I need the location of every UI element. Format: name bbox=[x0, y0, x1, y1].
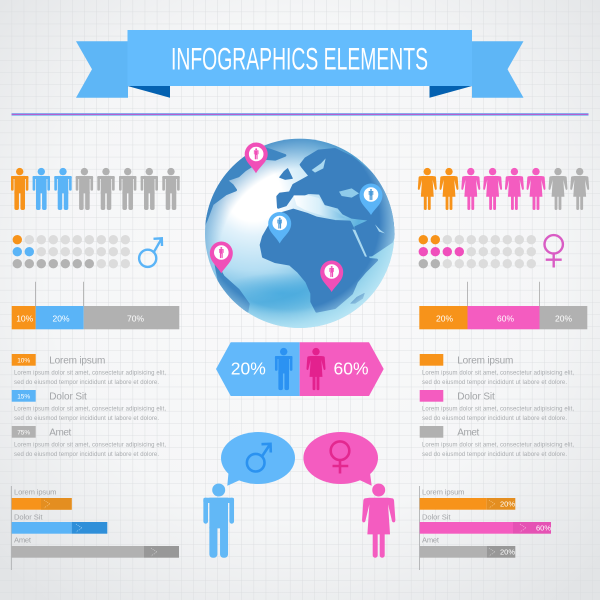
left legend bbox=[12, 354, 166, 458]
bar: dolor sit: Dolor Sit bbox=[14, 512, 43, 521]
legend item: dolor sit bbox=[420, 390, 574, 422]
arabia bbox=[356, 221, 395, 255]
left horizontal bar chart bbox=[11, 486, 179, 570]
legend item: dolor sit: 15% bbox=[17, 394, 30, 400]
header divider line bbox=[12, 113, 588, 116]
legend item: amet: sed do eiusmod tempor incididunt ut labore et dolore. bbox=[422, 452, 567, 458]
title: INFOGRAPHICS ELEMENTS bbox=[171, 40, 428, 76]
legend item: amet: Lorem ipsum dolor sit amet, consectetur adipisicing elit, bbox=[422, 443, 574, 449]
bar: amet 20%: 20% bbox=[500, 548, 515, 556]
figure: woman bbox=[362, 484, 395, 558]
legend item: dolor sit bbox=[12, 390, 166, 422]
bar: lorem ipsum 20%: Lorem ipsum bbox=[422, 487, 464, 496]
badge woman icon bbox=[306, 348, 326, 390]
baltic sea bbox=[312, 158, 326, 173]
eurasia bbox=[278, 149, 395, 234]
male pictogram row bbox=[11, 168, 180, 210]
legend item: lorem ipsum: Lorem ipsum bbox=[457, 355, 513, 366]
africa bbox=[261, 210, 377, 311]
legend item: lorem ipsum: Lorem ipsum dolor sit amet, consectetur adipisicing elit, bbox=[422, 371, 574, 377]
pin: blue west africa bbox=[268, 212, 291, 244]
female stacked percentage bar bbox=[419, 282, 587, 329]
male stacked percentage bar: 10% bbox=[16, 314, 34, 324]
red sea bbox=[352, 229, 367, 257]
female pictogram row bbox=[418, 168, 589, 210]
legend item: dolor sit: Dolor Sit bbox=[49, 391, 87, 402]
title ribbon bbox=[76, 30, 524, 98]
bar: amet 20% bbox=[420, 536, 515, 558]
legend item: amet: Amet bbox=[457, 427, 480, 438]
bar: lorem ipsum bbox=[12, 487, 72, 510]
comparison badge bbox=[216, 342, 384, 396]
male dot matrix bbox=[13, 235, 130, 268]
legend item: lorem ipsum bbox=[420, 354, 574, 386]
madagascar bbox=[351, 293, 364, 303]
bar: amet 20%: Amet bbox=[422, 536, 440, 545]
female stacked percentage bar: 60% bbox=[497, 314, 514, 324]
legend item: amet: sed do eiusmod tempor incididunt ut labore et dolore. bbox=[14, 452, 159, 458]
male stacked percentage bar bbox=[12, 282, 179, 329]
icon: female symbol bbox=[544, 235, 563, 268]
pin: pink south america bbox=[210, 242, 233, 274]
badge male side bbox=[216, 342, 300, 396]
ribbon left tail bbox=[76, 41, 128, 98]
bar: amet bbox=[12, 536, 179, 558]
right horizontal bar chart bbox=[420, 486, 551, 570]
bar: lorem ipsum 20% bbox=[420, 487, 515, 510]
pin: pink southern africa bbox=[320, 260, 343, 292]
legend item: dolor sit: Dolor Sit bbox=[457, 391, 495, 402]
legend item: amet: 75% bbox=[17, 430, 30, 436]
legend item: dolor sit: sed do eiusmod tempor incididunt ut labore et dolore. bbox=[422, 416, 567, 422]
pin: pink north america bbox=[245, 142, 268, 173]
bar: dolor sit bbox=[12, 512, 107, 534]
legend item: amet bbox=[12, 426, 166, 458]
ribbon right fold bbox=[430, 86, 472, 98]
black sea bbox=[339, 188, 359, 198]
legend item: amet bbox=[420, 426, 574, 458]
uk and ireland bbox=[280, 169, 292, 179]
legend item: dolor sit: sed do eiusmod tempor incididunt ut labore et dolore. bbox=[14, 416, 159, 422]
legend item: lorem ipsum: Lorem ipsum dolor sit amet, consectetur adipisicing elit, bbox=[14, 371, 166, 377]
right legend bbox=[420, 354, 574, 458]
globe bbox=[202, 139, 395, 328]
badge female percentage: 60% bbox=[333, 358, 369, 378]
bar: dolor sit 60% bbox=[420, 512, 551, 534]
bar: lorem ipsum 20%: 20% bbox=[500, 500, 515, 508]
male stacked percentage bar: 70% bbox=[127, 314, 144, 324]
legend item: dolor sit: Lorem ipsum dolor sit amet, consectetur adipisicing elit, bbox=[422, 407, 574, 413]
legend item: lorem ipsum: sed do eiusmod tempor incididunt ut labore et dolore. bbox=[422, 380, 567, 386]
ribbon right tail bbox=[472, 41, 524, 98]
badge female side bbox=[300, 342, 384, 396]
legend item: amet: Amet bbox=[49, 427, 72, 438]
pin: blue asia bbox=[360, 184, 382, 215]
bar: dolor sit 60%: Dolor Sit bbox=[422, 512, 451, 521]
north america and greenland bbox=[202, 147, 285, 230]
female stacked percentage bar: 20% bbox=[555, 314, 572, 324]
speech bubble: male bbox=[221, 432, 295, 486]
bar: amet: Amet bbox=[14, 536, 32, 545]
bar: dolor sit 60%: 60% bbox=[536, 524, 551, 532]
figure: man bbox=[203, 484, 234, 558]
south america bbox=[216, 263, 248, 312]
bar: lorem ipsum: Lorem ipsum bbox=[14, 487, 56, 496]
mediterranean highlight bbox=[294, 195, 345, 218]
female stacked percentage bar: 20% bbox=[436, 314, 453, 324]
ribbon left fold bbox=[128, 86, 170, 98]
female dot matrix bbox=[419, 235, 536, 268]
speech bubble: female bbox=[303, 432, 378, 486]
ribbon main band bbox=[128, 30, 472, 86]
legend item: lorem ipsum: Lorem ipsum bbox=[49, 355, 105, 366]
legend item: dolor sit: Lorem ipsum dolor sit amet, consectetur adipisicing elit, bbox=[14, 407, 166, 413]
persian gulf bbox=[375, 224, 385, 233]
legend item: lorem ipsum: 10% bbox=[17, 358, 30, 364]
legend item: lorem ipsum bbox=[12, 354, 166, 386]
male stacked percentage bar: 20% bbox=[52, 314, 70, 324]
badge male percentage: 20% bbox=[231, 358, 266, 378]
icon: male symbol bbox=[139, 238, 162, 267]
badge man icon bbox=[275, 348, 292, 390]
legend item: lorem ipsum: sed do eiusmod tempor incididunt ut labore et dolore. bbox=[14, 380, 159, 386]
legend item: amet: Lorem ipsum dolor sit amet, consectetur adipisicing elit, bbox=[14, 443, 166, 449]
